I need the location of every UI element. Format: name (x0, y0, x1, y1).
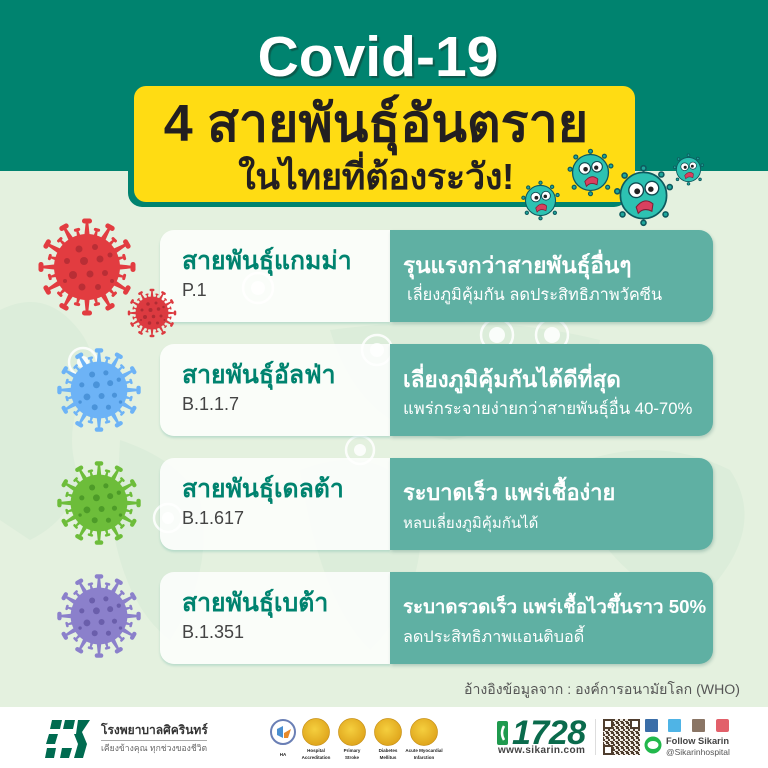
hospital tagline: เคียงข้างคุณ ทุกช่วงของชีวิต (101, 743, 207, 753)
icon: red virus small (128, 288, 176, 338)
headline: ระบาดเร็ว แพร่เชื้อง่าย (403, 480, 615, 505)
detail: ลดประสิทธิภาพแอนติบอดี้ (403, 628, 584, 646)
header band (0, 0, 768, 171)
row: alpha (159, 344, 716, 440)
icon: blue virus (57, 348, 141, 432)
hospital logo mark (45, 720, 90, 758)
heading line 1: 4 สายพันธุ์อันตราย (164, 95, 588, 153)
hospital name: โรงพยาบาลศิครินทร์ (101, 723, 208, 737)
title: Covid-19 (258, 25, 498, 89)
yellow title box (128, 86, 635, 207)
footer (0, 707, 768, 768)
icon: purple virus (57, 574, 141, 658)
headline: รุนแรงกว่าสายพันธุ์อื่นๆ (403, 253, 631, 278)
name: สายพันธุ์เดลต้า (182, 476, 344, 503)
code: B.1.351 (182, 622, 244, 642)
box shadow (128, 92, 628, 207)
row: gamma (159, 230, 716, 326)
name: สายพันธุ์เบต้า (182, 590, 328, 617)
accreditation seals: HA (280, 752, 287, 757)
accreditation seals: Primary (344, 748, 361, 753)
phone icon (497, 721, 508, 745)
code: B.1.1.7 (182, 394, 239, 414)
social handle: @Sikarinhospital (666, 747, 730, 757)
source note: อ้างอิงข้อมูลจาก : องค์การอนามัยโลก (WHO) (464, 681, 740, 697)
detail: เลี่ยงภูมิคุ้มกัน ลดประสิทธิภาพวัคซีน (407, 286, 662, 304)
white card beta (160, 572, 390, 664)
accreditation seals: Acute Myocardial (405, 748, 443, 753)
white card gamma (160, 230, 390, 322)
accreditation seals: Accreditation (302, 755, 331, 760)
icon: green virus (57, 461, 141, 545)
accreditation seals: Hospital (307, 748, 325, 753)
website: www.sikarin.com (498, 745, 585, 756)
headline: ระบาดรวดเร็ว แพร่เชื้อไวขึ้นราว 50% (403, 596, 706, 617)
accreditation seals: Infarction (414, 755, 434, 760)
icon: red virus large (38, 218, 136, 316)
QR code (603, 719, 640, 755)
headline: เลี่ยงภูมิคุ้มกันได้ดีที่สุด (403, 367, 621, 392)
icon: cartoon viruses (521, 148, 704, 226)
hotline number: 1728 (512, 714, 586, 752)
white card alpha (160, 344, 390, 436)
code: P.1 (182, 280, 207, 300)
code: B.1.617 (182, 508, 244, 528)
row: delta (159, 458, 716, 554)
accreditation seals: Mellitus (380, 755, 397, 760)
white card delta (160, 458, 390, 550)
box fill (134, 86, 635, 202)
detail: หลบเลี่ยงภูมิคุ้มกันได้ (403, 515, 538, 532)
detail: แพร่กระจายง่ายกว่าสายพันธุ์อื่น 40-70% (403, 399, 692, 418)
world map background (68, 322, 570, 531)
teal card beta (390, 572, 713, 664)
accreditation seals (270, 718, 443, 760)
name: สายพันธุ์อัลฟ่า (182, 362, 336, 389)
footer divider (595, 719, 596, 755)
teal card gamma (390, 230, 713, 322)
heading line 2: ในไทยที่ต้องระวัง! (238, 156, 514, 197)
hospital tagline (101, 740, 207, 755)
teal card alpha (390, 344, 713, 436)
name: สายพันธุ์แกมม่า (182, 248, 352, 275)
social icons (644, 719, 729, 754)
follow label: Follow Sikarin (666, 736, 729, 746)
accreditation seals: Diabetes (379, 748, 398, 753)
teal card delta (390, 458, 713, 550)
accreditation seals: Stroke (345, 755, 359, 760)
